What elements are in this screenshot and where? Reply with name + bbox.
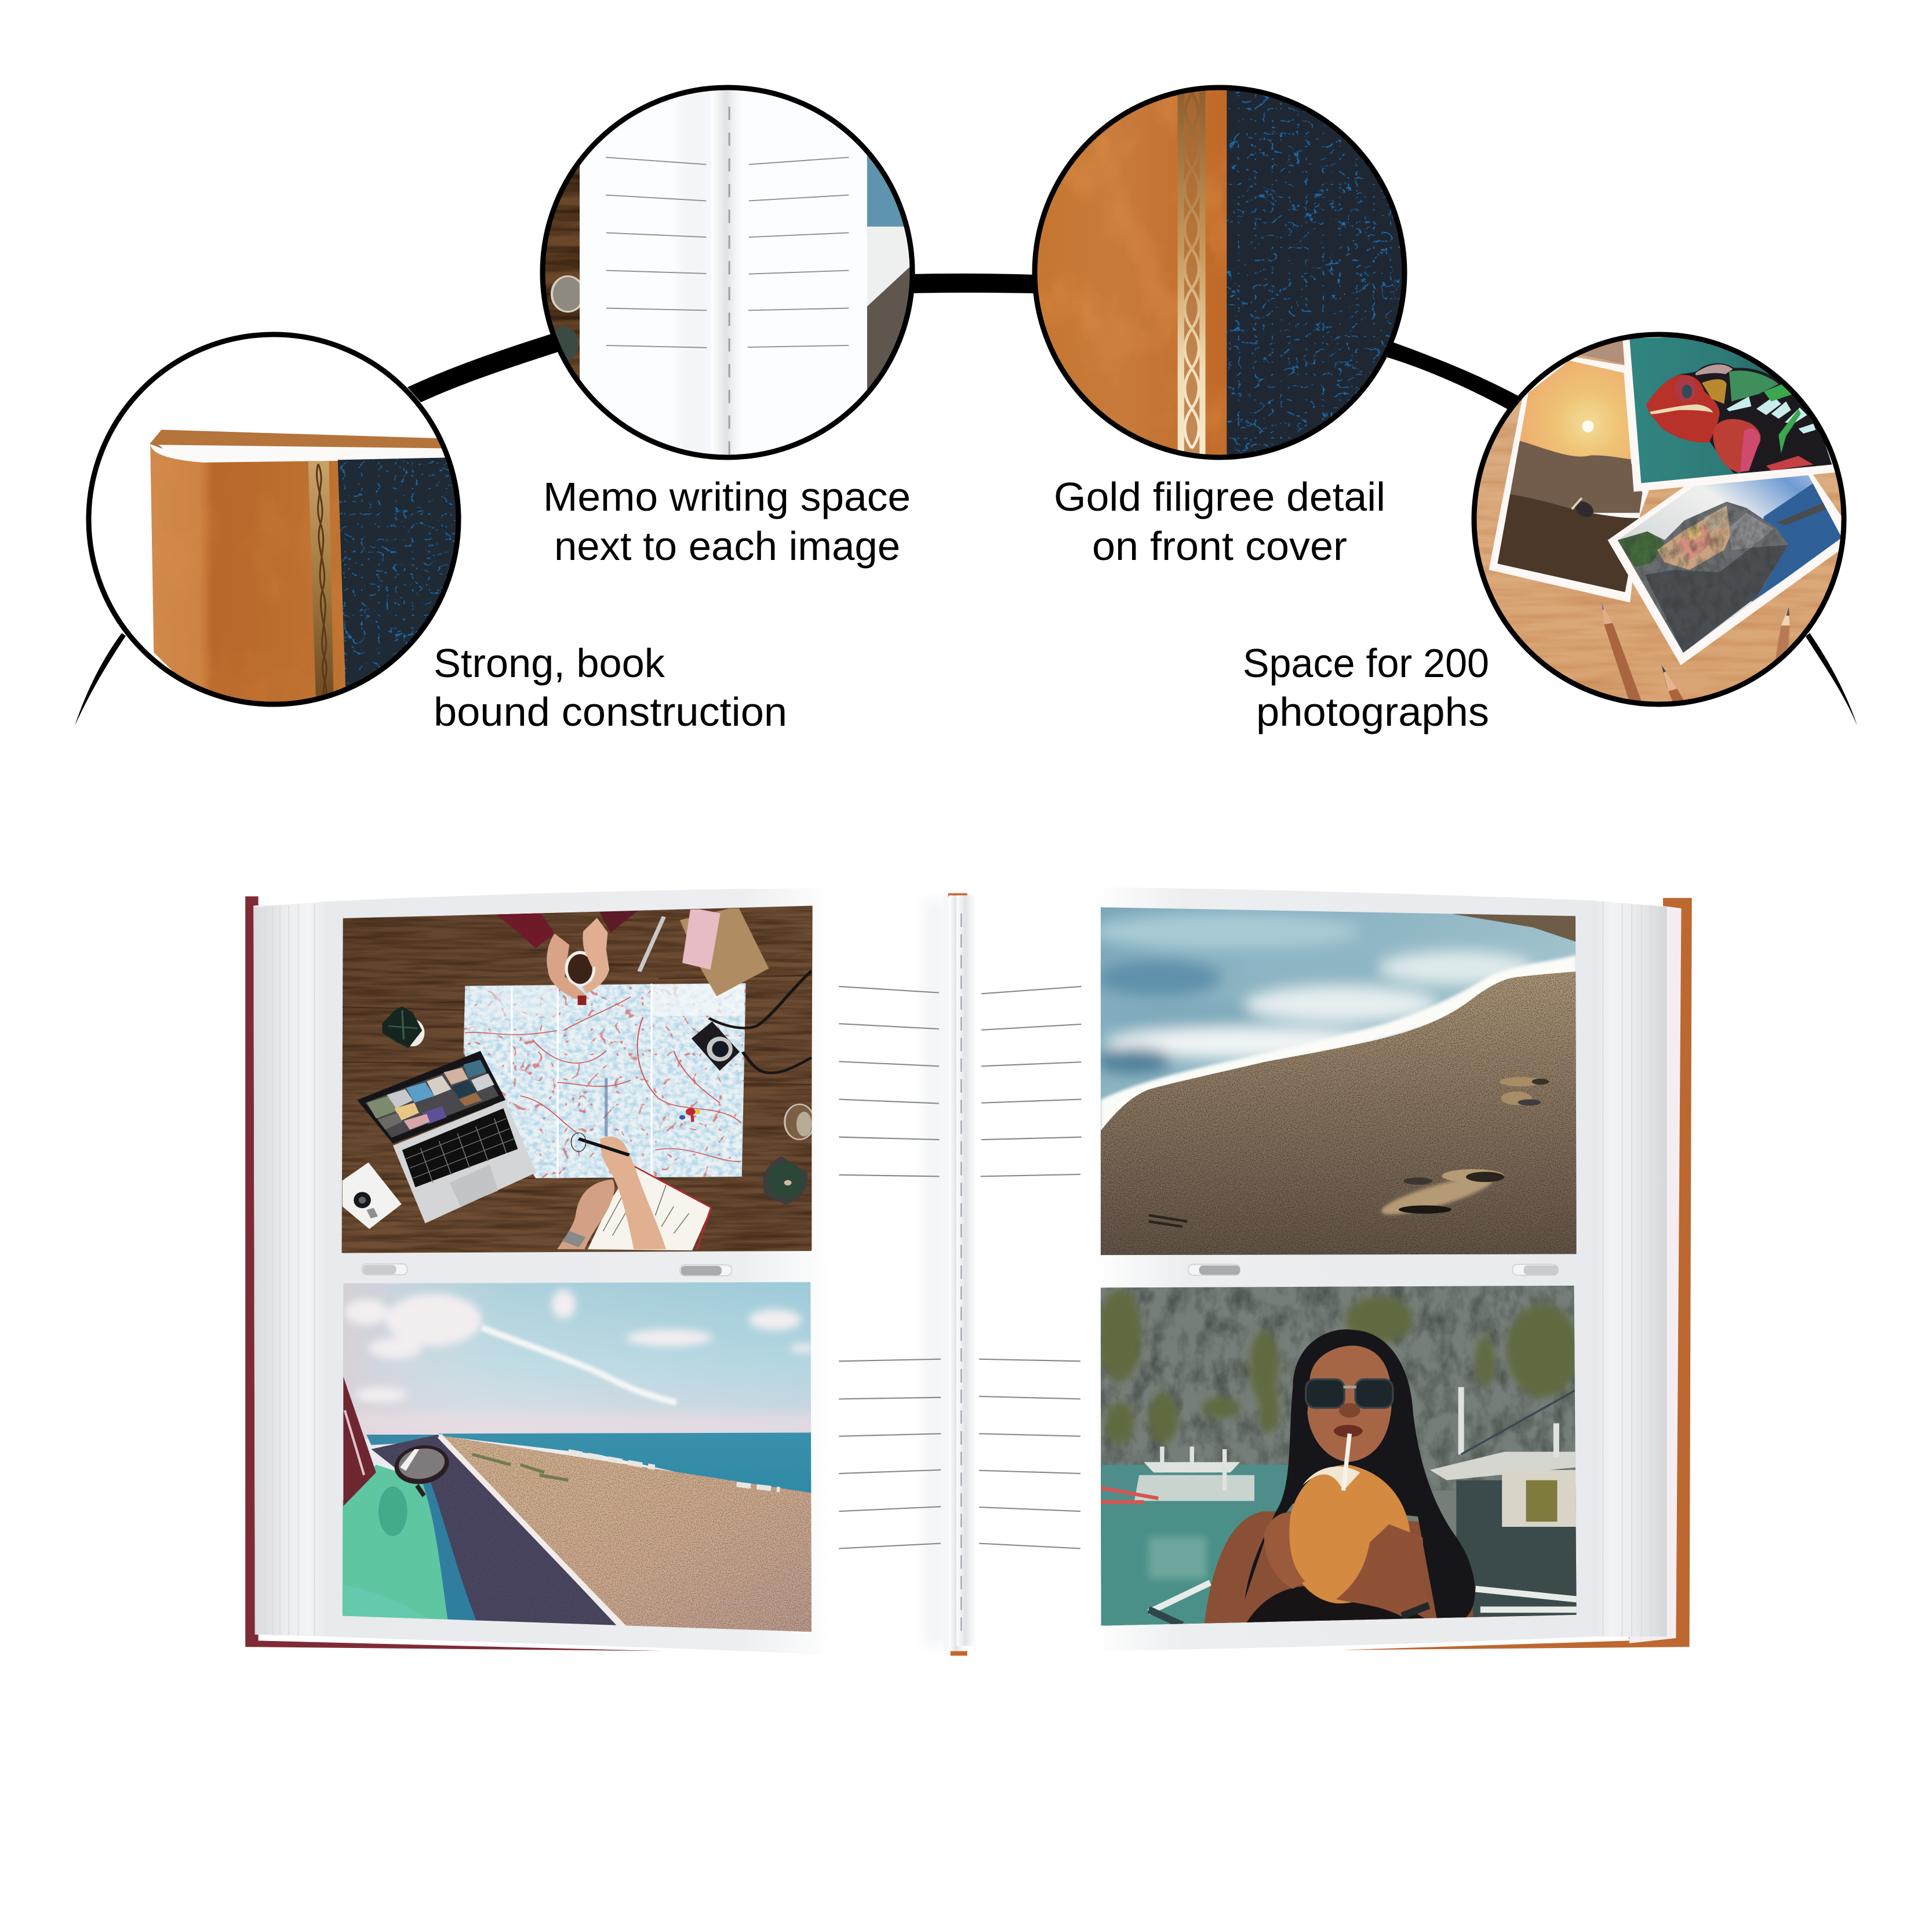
memo lines left page: [839, 987, 941, 1548]
succulent: [401, 1019, 424, 1046]
cactus pot: [763, 1156, 807, 1205]
sleeves: [490, 910, 555, 948]
hands: [1264, 1513, 1305, 1589]
connector curve: construction to memo space: [407, 334, 560, 402]
photo: woman with coconut: [1098, 1283, 1579, 1631]
woman hair: [1245, 1329, 1475, 1620]
left page with photo sleeves: [253, 886, 985, 1656]
laptop screen: [357, 1051, 505, 1144]
chameleon photo: [1622, 330, 1853, 492]
blue leather: [1227, 80, 1416, 466]
connector tail: left: [75, 633, 126, 726]
photo: sandy beach footprints: [1091, 903, 1579, 1260]
photo: travel desk flat lay: [336, 904, 818, 1256]
caption: space for 200 photographs: Space for 200: [1243, 641, 1489, 686]
back cover top edge: [150, 430, 442, 449]
coast photo: [1608, 473, 1846, 665]
gutter: [712, 85, 744, 466]
pages top: [159, 445, 443, 451]
circle: scattered photographs detail: [1467, 325, 1853, 711]
circle: gold filigree and leather detail: [1021, 80, 1416, 466]
connector curve: gold filigree to 200 photographs: [1387, 342, 1526, 413]
left cover: [245, 893, 967, 1656]
connector tail: right: [1806, 633, 1857, 726]
pins: [686, 1108, 696, 1115]
glass sliver: [552, 276, 584, 312]
open photo album: [245, 886, 1692, 1656]
right cover: [1341, 896, 1692, 1650]
kraft envelope: [680, 907, 769, 996]
beach photo sliver: [867, 155, 922, 235]
left sleeve top photo frame shade: [342, 906, 813, 1253]
memo page right: [744, 85, 867, 466]
white instant camera: [343, 1162, 402, 1229]
woman body: [1204, 1511, 1473, 1625]
infographic canvas: [75, 85, 1857, 1656]
pen: [639, 916, 664, 972]
right sleeve: [1093, 887, 1593, 1651]
photo: road trip beach: [340, 1278, 818, 1635]
right page stack: [1593, 901, 1667, 1636]
memo page left: [580, 85, 713, 466]
coconut and straw: [1288, 1465, 1411, 1603]
laptop base: [393, 1100, 536, 1223]
notebook: [588, 1166, 711, 1250]
left gutter: [943, 896, 965, 1651]
memo lines: [606, 157, 849, 348]
sleeve tabs: [1188, 1264, 1558, 1275]
woman face: [1307, 1345, 1392, 1462]
left sleeve: [326, 888, 832, 1655]
pencil three: [1775, 607, 1790, 661]
camera and strap: [709, 971, 812, 1073]
gold filigree strip: [1178, 80, 1206, 466]
map: [464, 983, 746, 1178]
right page with photo sleeves: [956, 886, 1681, 1653]
lower hands: [600, 1137, 666, 1249]
circle: memo writing space detail: [531, 81, 922, 466]
boats at right: [1456, 1480, 1579, 1631]
upper hands and cup: [547, 934, 590, 999]
pencil one: [1602, 602, 1642, 704]
keyboard: [402, 1108, 518, 1187]
right gutter: [956, 896, 977, 1646]
pink card: [682, 908, 721, 970]
lavender page edge: [1629, 901, 1681, 1643]
spine and orange cover: [150, 444, 348, 710]
gold filigree strip: [308, 461, 334, 699]
caption: gold filigree detail: on front cover: [1092, 523, 1347, 569]
circle: book bound spine detail: [81, 330, 470, 713]
sunglasses: [1306, 1380, 1344, 1408]
connector curve: memo space to gold filigree: [910, 274, 1038, 293]
glass: [785, 1104, 814, 1140]
caption: memo writing space: next to each image: [554, 523, 900, 569]
caption: space for 200 photographs: photographs: [1256, 689, 1489, 734]
orange leather: [1021, 80, 1228, 466]
caption: memo writing space: Memo writing space: [543, 474, 911, 519]
memo lines right page: [979, 987, 1082, 1548]
pencil two: [1661, 665, 1686, 704]
left gutter shade: [924, 901, 945, 1646]
wooden desk: [1467, 325, 1853, 711]
desk photo sliver: [545, 166, 580, 379]
caption: gold filigree detail: Gold filigree detail: [1054, 474, 1385, 519]
sleeve tabs: [362, 1264, 732, 1276]
left page stack: [253, 901, 327, 1636]
right page body: [956, 886, 1667, 1653]
left page body: [253, 886, 985, 1656]
sunset photo: [1489, 357, 1652, 602]
cactus pot sliver: [549, 326, 578, 362]
blue leather panel: [337, 458, 456, 687]
caption: strong book bound construction: bound construction: [434, 689, 787, 734]
caption: strong book bound construction: Strong, book: [434, 641, 665, 686]
green car: [343, 1465, 448, 1620]
